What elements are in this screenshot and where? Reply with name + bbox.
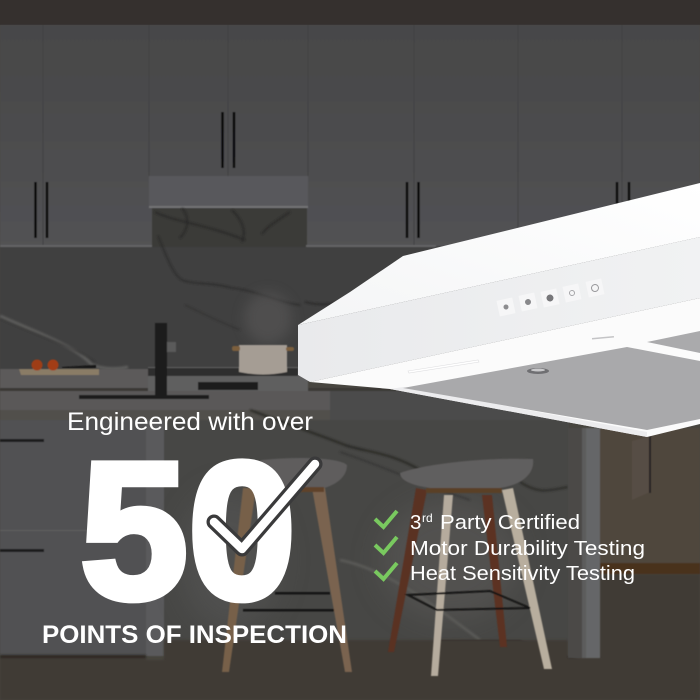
item: heat sensitivity testing: Heat Sensitivity Testing	[410, 562, 635, 585]
item: 3rd party certified: rd	[422, 511, 433, 525]
cutting board	[19, 369, 99, 375]
sensor	[527, 368, 549, 374]
stool left	[222, 458, 352, 672]
big number 50 with check: 50	[80, 422, 296, 640]
stool right	[388, 459, 552, 676]
icon: large check mark	[214, 464, 315, 549]
faucet	[155, 323, 167, 399]
checklist	[375, 511, 645, 585]
marble backsplash veins	[0, 208, 345, 369]
island	[0, 420, 569, 656]
stove steam	[244, 292, 292, 344]
item: 3rd party certified: Party Certified	[440, 511, 580, 534]
subheading: points of inspection: POINTS OF INSPECTION	[42, 621, 347, 649]
light bar	[408, 360, 479, 373]
pot	[239, 345, 287, 374]
heading: engineered with over: Engineered with over	[67, 408, 313, 436]
second filter	[647, 331, 700, 353]
upper cabinets	[0, 25, 700, 376]
item: 3rd party certified: 3	[410, 511, 421, 534]
logo mark	[592, 336, 614, 339]
main filter	[403, 347, 700, 430]
counter and cooktop	[0, 323, 700, 421]
hood front face	[298, 237, 700, 382]
floor	[0, 574, 700, 700]
item: motor durability testing: Motor Durability Testing	[410, 537, 645, 560]
column and wood cabinet	[568, 428, 700, 658]
hood underside	[310, 298, 700, 437]
item: 3rd party certified	[375, 511, 580, 534]
range hood	[298, 183, 700, 437]
hood top surface	[298, 183, 700, 325]
control panel buttons	[497, 279, 604, 316]
